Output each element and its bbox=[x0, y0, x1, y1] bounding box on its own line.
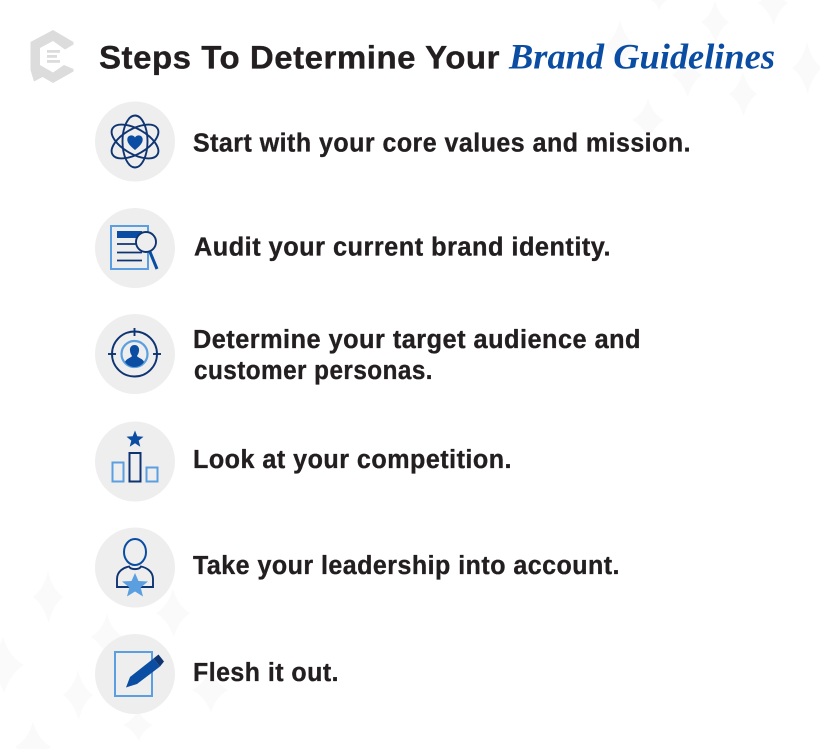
icon: person with star bbox=[95, 528, 175, 608]
icon: star over bars bbox=[95, 422, 175, 502]
icon: document with magnifier bbox=[95, 208, 175, 288]
step 3: target audience: customer personas. bbox=[194, 357, 433, 385]
title: Steps To Determine Your bbox=[99, 40, 500, 76]
step 6: flesh it out bbox=[95, 634, 339, 714]
title: Brand Guidelines bbox=[508, 36, 775, 76]
logo bbox=[30, 30, 74, 83]
step text: Start with your core values and mission. bbox=[193, 130, 691, 158]
step 3: target audience bbox=[95, 314, 641, 394]
step text: Look at your competition. bbox=[193, 446, 512, 474]
step text: Audit your current brand identity. bbox=[194, 234, 611, 262]
icon: target with person bbox=[95, 314, 175, 394]
step 2: audit bbox=[95, 208, 611, 288]
step 4: competition bbox=[95, 422, 512, 502]
step text: Determine your target audience and bbox=[193, 326, 641, 354]
title bbox=[99, 36, 775, 76]
icon: pencil on paper bbox=[95, 634, 175, 714]
step text: Flesh it out. bbox=[193, 659, 339, 687]
step text: Take your leadership into account. bbox=[193, 552, 620, 580]
step 5: leadership bbox=[95, 528, 620, 608]
icon: atom with heart bbox=[95, 102, 175, 182]
step 1: core values bbox=[95, 102, 691, 182]
